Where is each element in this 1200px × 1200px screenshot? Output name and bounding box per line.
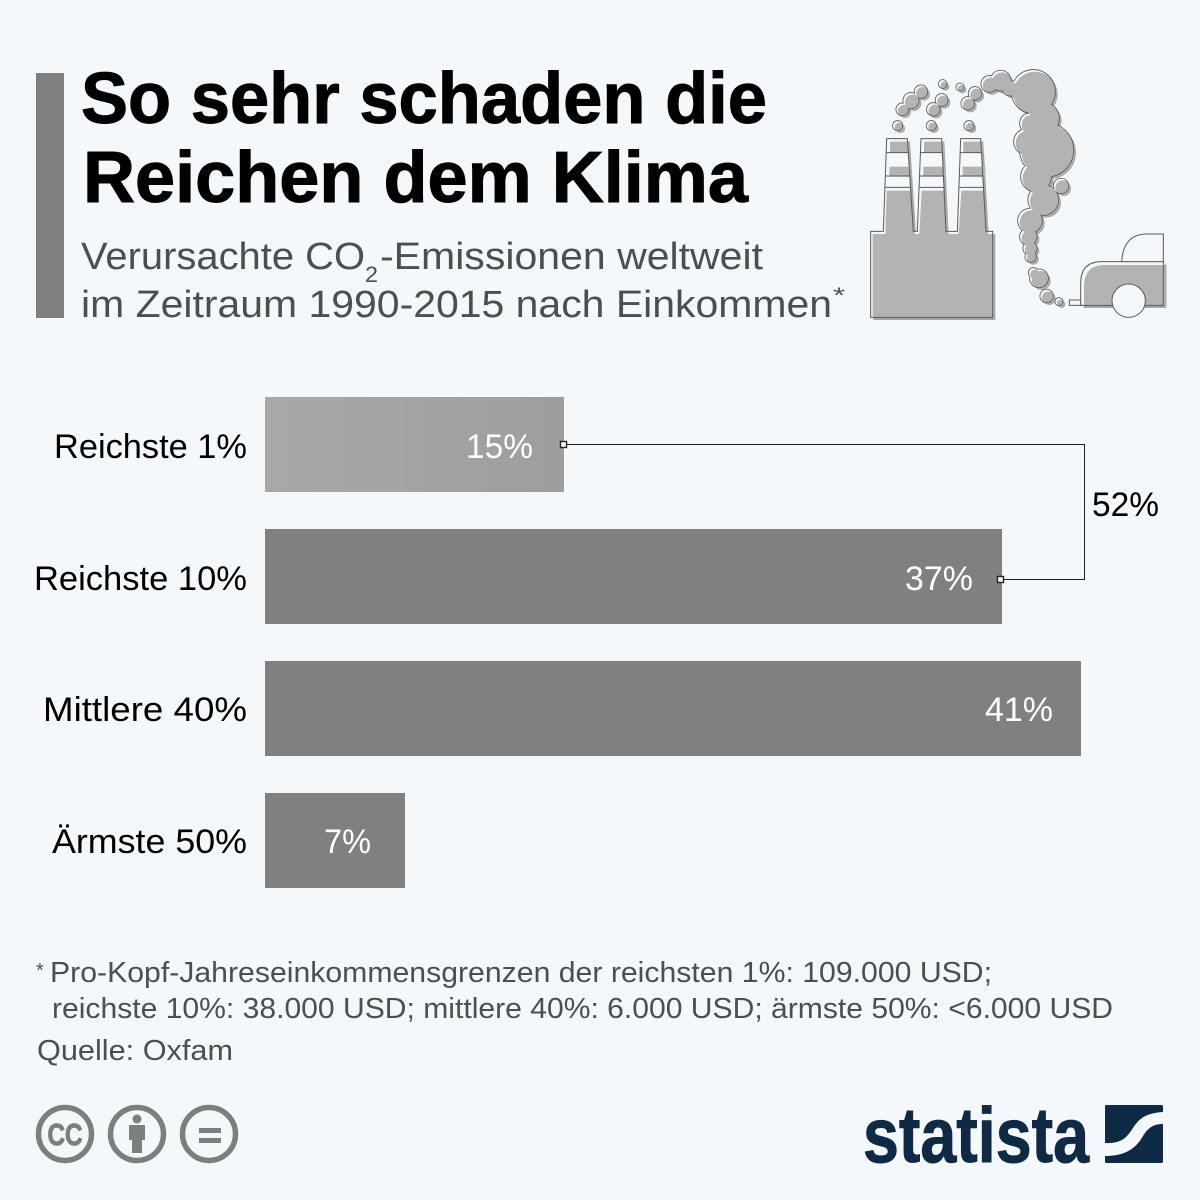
- bar row: Reichste 10%: 37%: [905, 560, 973, 598]
- statista logo: statista: [863, 1091, 1090, 1179]
- icon: statista mark: [1105, 1105, 1163, 1163]
- bar chart: [34, 397, 1081, 888]
- bracket callout: 52%: 52%: [1092, 486, 1159, 524]
- subtitle: Verursachte CO: [81, 236, 365, 278]
- footnote: Pro-Kopf-Jahreseinkommensgrenzen der reichsten 1%: 109.000 USD;: [50, 957, 992, 989]
- title: So sehr schaden die: [81, 59, 767, 139]
- icon: attribution: [110, 1108, 164, 1160]
- title: [81, 59, 767, 218]
- footnote: [36, 957, 1113, 1025]
- icon: car: [1069, 234, 1167, 317]
- subtitle: 2: [365, 262, 378, 287]
- illustration: factory, smoke and car: [871, 70, 1167, 320]
- footnote: reichste 10%: 38.000 USD; mittlere 40%: 6.000 USD; ärmste 50%: <6.000 USD: [52, 993, 1113, 1025]
- subtitle: -Emissionen weltweit: [380, 236, 763, 278]
- bar row: Ärmste 50%: [52, 793, 405, 888]
- subtitle: im Zeitraum 1990-2015 nach Einkommen: [81, 284, 832, 326]
- header accent bar: [36, 73, 64, 318]
- bar row: Mittlere 40%: [43, 661, 1081, 756]
- bar row: Reichste 1%: Reichste 1%: [54, 428, 247, 466]
- bar row: Reichste 1%: 15%: [466, 428, 533, 466]
- bar row: Mittlere 40%: Mittlere 40%: [43, 691, 247, 729]
- bar row: Ärmste 50%: Ärmste 50%: [52, 823, 247, 861]
- footnote: *: [36, 960, 44, 982]
- bar row: Ärmste 50%: 7%: [324, 823, 371, 861]
- icon: no derivatives: [182, 1108, 236, 1160]
- source: Quelle: Oxfam: [37, 1035, 233, 1067]
- bar row: Reichste 10%: Reichste 10%: [34, 560, 247, 598]
- bar row: Reichste 10%: [34, 529, 1002, 624]
- bracket callout: 52%: [560, 442, 1159, 582]
- icon: smoke clouds: [893, 70, 1076, 308]
- icon: factory: [871, 139, 995, 320]
- bar row: Mittlere 40%: 41%: [985, 691, 1053, 729]
- bar row: Reichste 1%: [54, 397, 564, 492]
- subtitle: *: [833, 283, 846, 308]
- title: Reichen dem Klima: [83, 138, 749, 218]
- icon: creative commons: CC: [48, 1117, 82, 1152]
- icon: creative commons: [38, 1108, 92, 1160]
- subtitle: [81, 236, 846, 326]
